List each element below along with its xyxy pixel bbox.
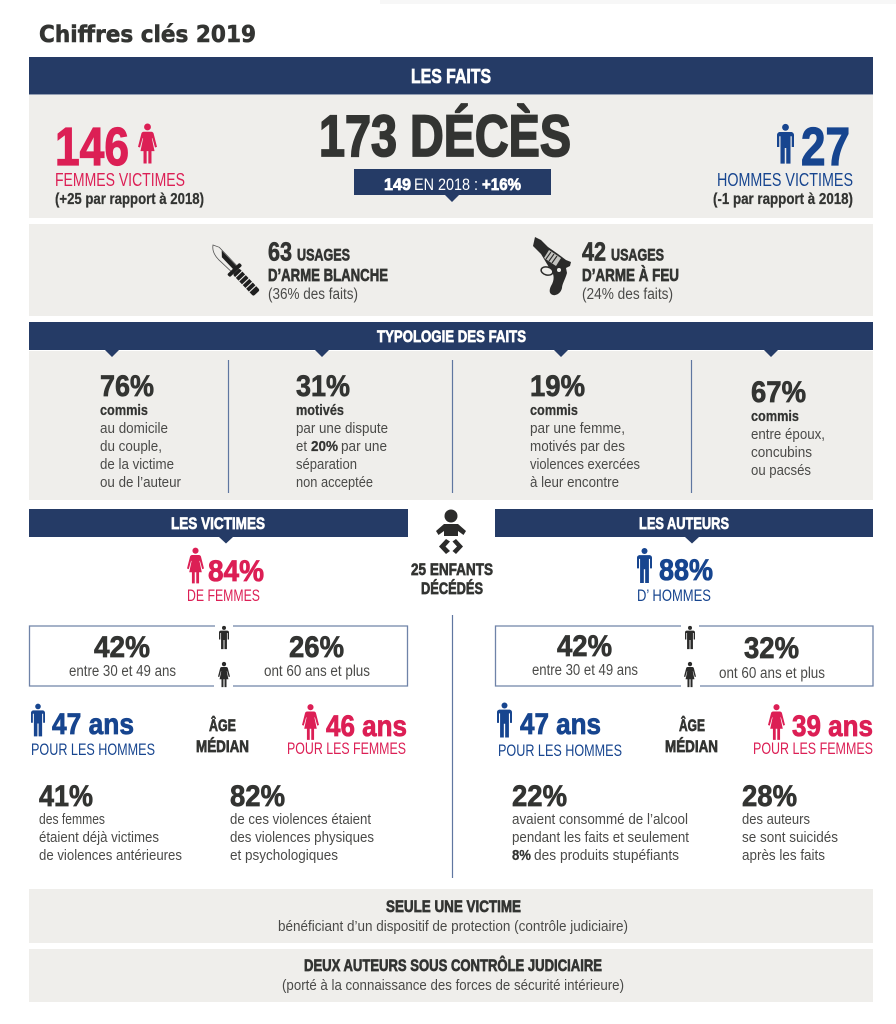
stat: 41%: 41%: [39, 780, 93, 813]
stat: 19%: 19%: [530, 370, 585, 403]
stat: total deces: +16%: [482, 175, 521, 194]
text: arme a feu: (24% des faits): [582, 286, 673, 303]
stat: 88% d'hommes: [637, 548, 713, 605]
stat: age median auteurs: ÂGE: [679, 716, 705, 735]
stat: 67%: entre époux,: [751, 426, 825, 443]
panel: seule une victime: [29, 889, 873, 943]
stat: age median auteurs: [497, 702, 873, 760]
stat: 31%: par une dispute: [296, 420, 388, 437]
stat: 41%: [39, 780, 182, 864]
stat: 41%: de violences antérieures: [39, 847, 182, 864]
stat: 88% d'hommes: D’ HOMMES: [637, 587, 711, 605]
stat: 76%: de la victime: [100, 456, 174, 473]
stat: 84% de femmes: DE FEMMES: [187, 587, 260, 605]
panel: age victimes: ont 60 ans et plus: [264, 663, 370, 680]
stat: 19%: violences exercées: [530, 456, 640, 473]
stat: 31%: séparation: [296, 456, 357, 473]
panel: age victimes: [30, 626, 408, 687]
stat: 76%: 76%: [100, 370, 154, 403]
heading: les victimes: LES VICTIMES: [171, 515, 265, 533]
panel: deux auteurs: DEUX AUTEURS SOUS CONTRÔLE JUDICIAIRE: [304, 956, 602, 975]
stat: 19%: commis: [530, 402, 578, 419]
heading: les victimes: [29, 509, 408, 544]
stat: 76%: commis: [100, 402, 148, 419]
text: arme a feu: [582, 236, 679, 303]
stat: femmes victimes: 146: [55, 117, 129, 177]
stat: age median victimes: POUR LES HOMMES: [31, 741, 155, 759]
stat: total deces: 173 DÉCÈS: [319, 104, 571, 169]
stat: 67%: ou pacsés: [751, 462, 811, 479]
stat: femmes victimes: [55, 117, 204, 208]
panel: typologie des faits: [29, 322, 873, 500]
text: arme blanche: USAGES: [297, 246, 350, 264]
text: arme blanche: D’ARME BLANCHE: [268, 265, 388, 285]
stat: age median auteurs: 47 ans: [520, 708, 601, 741]
stat: 28%: [742, 780, 838, 864]
icon: baby: [436, 510, 466, 554]
stat: age median victimes: [31, 704, 407, 759]
stat: total deces: 149: [384, 175, 411, 194]
stat: 28%: après les faits: [742, 847, 825, 864]
stat: 31%: [296, 370, 388, 491]
stat: 28%: 28%: [742, 780, 797, 813]
panel: seule une victime: bénéficiant d’un dispositif de protection (contrôle judiciaire): [278, 918, 628, 935]
stat: 22%: [512, 780, 690, 864]
stat: 82%: des violences physiques: [230, 829, 374, 846]
heading: les auteurs: [495, 509, 873, 544]
stat: 19%: à leur encontre: [530, 474, 619, 491]
stat: hommes victimes: 27: [801, 117, 850, 177]
stat: hommes victimes: [713, 117, 853, 208]
heading: les faits: [29, 57, 873, 94]
stat: 76%: ou de l’auteur: [100, 474, 181, 491]
stat: 19%: motivés par des: [530, 438, 625, 455]
stat: age median victimes: 47 ans: [52, 708, 134, 741]
stat: 67%: commis: [751, 408, 799, 425]
text: arme a feu: D’ARME À FEU: [582, 264, 679, 285]
stat: 67%: [751, 376, 825, 479]
stat: 28%: se sont suicidés: [742, 829, 838, 846]
panel: seule une victime: SEULE UNE VICTIME: [386, 898, 521, 916]
stat: 31%: non acceptée: [296, 474, 373, 491]
icon: revolver: [533, 237, 571, 295]
stat: 67%: 67%: [751, 376, 806, 409]
panel: age auteurs: [496, 626, 873, 687]
panel: age victimes: 26%: [289, 631, 344, 664]
stat: 41%: étaient déjà victimes: [39, 829, 159, 846]
stat: 31%: motivés: [296, 402, 344, 419]
text: arme blanche: (36% des faits): [268, 286, 358, 303]
panel: age auteurs: 32%: [744, 632, 799, 665]
stat: 82%: 82%: [230, 780, 285, 813]
stat: age median victimes: 46 ans: [326, 710, 407, 743]
callout: enfants decedes: [411, 510, 493, 598]
text: arme blanche: [268, 236, 388, 303]
panel: age auteurs: ont 60 ans et plus: [719, 665, 825, 682]
stat: 82%: de ces violences étaient: [230, 811, 372, 828]
stat: 88% d'hommes: 88%: [659, 554, 713, 587]
stat: 19%: [530, 370, 640, 491]
stat: age median victimes: POUR LES FEMMES: [287, 740, 406, 758]
stat: age median auteurs: 39 ans: [792, 710, 873, 743]
stat: age median auteurs: MÉDIAN: [665, 737, 718, 756]
stat: 22%: 8%: [512, 847, 531, 864]
stat: 31%: 20%: [311, 438, 338, 455]
stat: 22%: des produits stupéfiants: [534, 847, 679, 864]
text: arme blanche: 63: [268, 236, 292, 266]
stat: age median auteurs: POUR LES HOMMES: [498, 742, 622, 760]
callout: enfants decedes: DÉCÉDÉS: [421, 579, 483, 598]
stat: hommes victimes: HOMMES VICTIMES: [717, 169, 853, 190]
text: arme a feu: 42: [582, 236, 606, 266]
panel: age victimes: entre 30 et 49 ans: [69, 663, 176, 680]
stat: 67%: concubins: [751, 444, 812, 461]
stat: 31%: par une: [341, 438, 387, 455]
panel: age auteurs: 42%: [557, 630, 612, 663]
heading: typologie des faits: TYPOLOGIE DES FAITS: [377, 328, 526, 346]
panel: age auteurs: entre 30 et 49 ans: [532, 662, 638, 679]
stat: 76%: au domicile: [100, 420, 168, 437]
stat: 31%: et: [296, 438, 308, 455]
stat: 84% de femmes: [187, 548, 264, 605]
stat: 22%: pendant les faits et seulement: [512, 829, 690, 846]
panel: deux auteurs: [29, 949, 873, 1002]
stat: femmes victimes: FEMMES VICTIMES: [55, 169, 185, 190]
heading: typologie des faits: [29, 322, 873, 357]
stat: femmes victimes: (+25 par rapport à 2018): [55, 191, 204, 208]
icon: knife: [206, 240, 263, 299]
stat: 22%: avaient consommé de l’alcool: [512, 811, 688, 828]
heading: les auteurs: LES AUTEURS: [639, 515, 729, 533]
stat: 22%: 22%: [512, 780, 567, 813]
stat: 19%: par une femme,: [530, 420, 625, 437]
stat: hommes victimes: (-1 par rapport à 2018): [713, 191, 853, 208]
stat: 82%: [230, 780, 374, 864]
stat: age median victimes: MÉDIAN: [196, 737, 249, 756]
stat: 41%: des femmes: [39, 811, 105, 828]
panel: armes: [29, 224, 873, 316]
stat: total deces: [319, 104, 571, 202]
stat: 84% de femmes: 84%: [208, 555, 264, 588]
callout: enfants decedes: 25 ENFANTS: [411, 560, 493, 579]
text: arme a feu: USAGES: [611, 246, 664, 264]
title: Chiffres clés 2019: [39, 22, 256, 48]
stat: 31%: 31%: [296, 370, 350, 403]
stat: 82%: et psychologiques: [230, 847, 338, 864]
panel: les faits: [29, 57, 873, 218]
stat: total deces: EN 2018 :: [414, 175, 478, 194]
panel: age victimes: 42%: [94, 631, 150, 664]
panel: deux auteurs: (porté à la connaissance des forces de sécurité intérieure): [282, 977, 624, 994]
stat: age median victimes: ÂGE: [209, 716, 236, 735]
stat: 76%: du couple,: [100, 438, 162, 455]
stat: 76%: [100, 370, 181, 491]
heading: les faits: LES FAITS: [411, 65, 491, 88]
stat: 28%: des auteurs: [742, 811, 810, 828]
